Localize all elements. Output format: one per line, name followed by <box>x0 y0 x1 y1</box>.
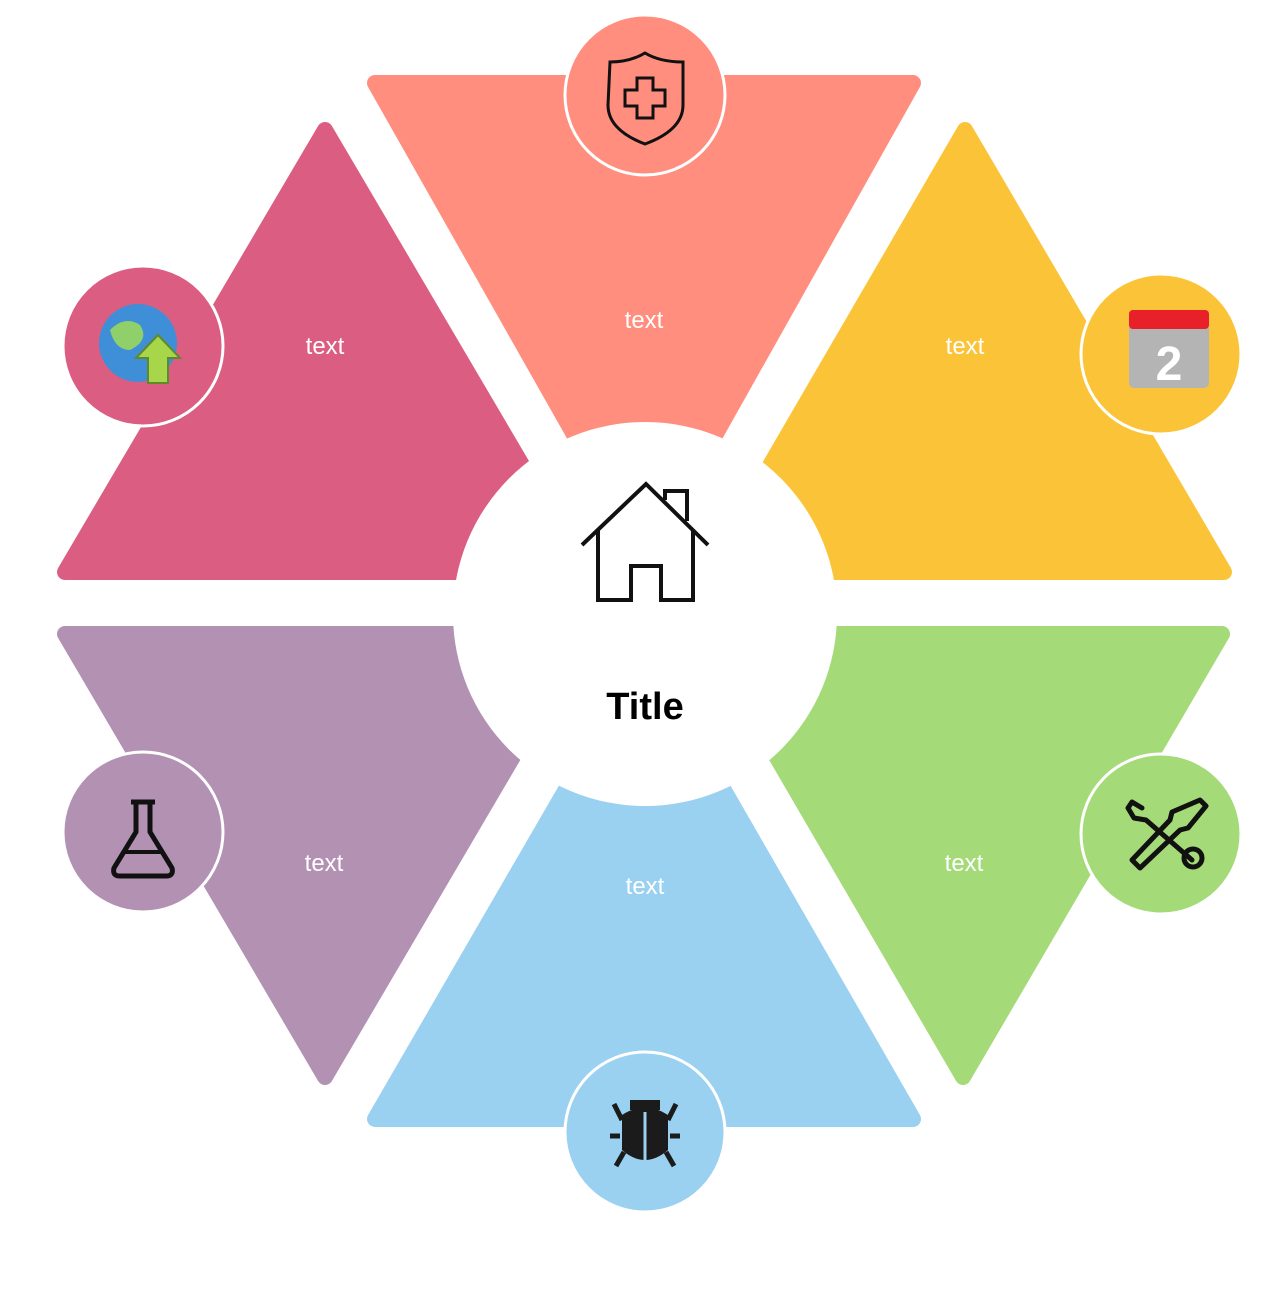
title: Title <box>606 686 684 728</box>
text: bottom: text <box>626 873 665 900</box>
icon circle: bug <box>565 1052 725 1212</box>
text: bottom-right: text <box>945 850 984 877</box>
icon circle: tools <box>1081 754 1241 914</box>
text: top-right: text <box>946 333 985 360</box>
icon circle: flask <box>63 752 223 912</box>
panel: top-left pink <box>65 130 585 572</box>
text: bottom-left: text <box>305 850 344 877</box>
panel: top-right yellow <box>708 130 1224 572</box>
icon: house <box>582 484 708 600</box>
icon circle: calendar <box>1081 274 1241 434</box>
icon circle: shield <box>565 15 725 175</box>
text: top-left: text <box>306 333 345 360</box>
icon circle: calendar: 2 <box>1156 338 1182 391</box>
panel: bottom-left purple <box>65 634 585 1077</box>
panel: bottom-right green <box>705 634 1222 1077</box>
center circle <box>453 422 837 806</box>
panel: bottom blue <box>375 653 913 1119</box>
panel: top salmon <box>375 83 913 560</box>
icon circle: globe upload <box>63 266 223 426</box>
text: top: text <box>625 307 664 334</box>
